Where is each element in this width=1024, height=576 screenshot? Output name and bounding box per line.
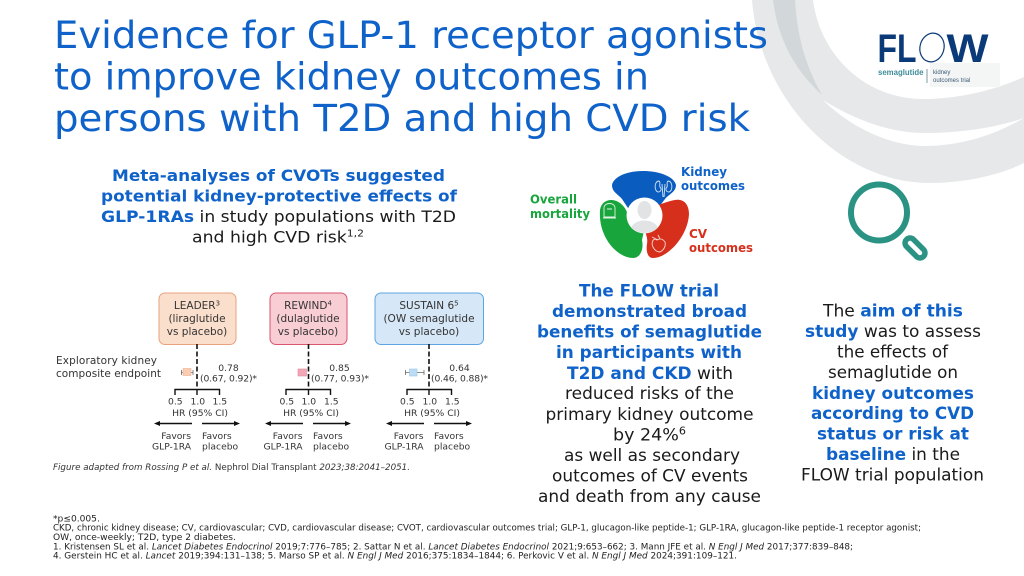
title: Evidence for GLP-1 receptor agonists bbox=[54, 13, 768, 57]
text block: FLOW trial results: benefits of semaglutide bbox=[537, 322, 762, 342]
study box: REWIND: REWIND bbox=[284, 300, 327, 312]
study box: SUSTAIN 6 bbox=[375, 293, 484, 344]
text block: FLOW trial results bbox=[537, 282, 762, 506]
text block: aim of study: the effects of bbox=[837, 342, 949, 362]
values: (0.67, 0.92)* bbox=[200, 374, 257, 384]
study box: SUSTAIN 6: (OW semaglutide bbox=[383, 313, 475, 325]
label: kidney outcomes: Kidney bbox=[681, 165, 727, 179]
hazard ratio marker bbox=[182, 368, 193, 376]
title: to improve kidney outcomes in bbox=[54, 54, 649, 98]
favors labels bbox=[152, 431, 239, 452]
values: (0.46, 0.88)* bbox=[431, 374, 488, 384]
FLOW logo: FL bbox=[878, 27, 916, 71]
favors labels: Favors bbox=[313, 431, 343, 442]
values: HR (95% CI) bbox=[283, 408, 339, 419]
favors labels: Favors bbox=[434, 431, 464, 442]
lobe: CV outcomes bbox=[644, 200, 689, 258]
favors arrows bbox=[154, 421, 240, 426]
text block: FLOW trial results: The FLOW trial bbox=[579, 282, 719, 300]
text block: aim of study: FLOW trial population bbox=[801, 466, 984, 484]
text block: FLOW trial results: as well as secondary bbox=[564, 446, 740, 465]
favors labels bbox=[263, 431, 350, 452]
favors labels: Favors bbox=[202, 431, 232, 442]
favors labels: placebo bbox=[313, 442, 350, 452]
values: 0.5 bbox=[280, 396, 294, 408]
label: overall mortality bbox=[530, 192, 590, 221]
lobe: overall mortality bbox=[600, 200, 645, 258]
footnotes: CKD, chronic kidney disease; CV, cardiovascular; CVD, cardiovascular disease; CVOT, cardiovascular outcomes trial; GLP-1, glucagon-like peptide-1; GLP-1RA, glucagon-like peptide-1 receptor agonist; bbox=[53, 524, 921, 534]
study box: LEADER bbox=[159, 293, 236, 344]
favors arrows bbox=[265, 421, 351, 426]
favors labels: placebo bbox=[202, 442, 239, 452]
text block: FLOW trial results: 6 bbox=[679, 426, 686, 438]
favors labels: Favors bbox=[161, 431, 191, 442]
footnotes: 1. Kristensen SL et al. Lancet Diabetes Endocrinol 2019;7:776–785; 2. Sattar N et al. Lancet Diabetes Endocrinol 2021;9:653–662; 3. Mann JFE et al. N Engl J Med 2017;377:839–848; bbox=[53, 542, 853, 552]
values: 0.85 bbox=[329, 363, 350, 374]
favors labels: GLP-1RA bbox=[384, 442, 424, 452]
values: 1.0 bbox=[190, 396, 205, 408]
text block: FLOW trial results: by 24% bbox=[613, 426, 675, 444]
text block: meta-analyses: Meta-analyses of CVOTs suggested bbox=[112, 166, 445, 185]
label: overall mortality: mortality bbox=[530, 207, 590, 221]
values: 0.78 bbox=[218, 363, 239, 374]
icon: magnifying glass bbox=[851, 184, 927, 260]
label: CV outcomes: outcomes bbox=[689, 241, 753, 255]
text block: aim of study bbox=[801, 302, 984, 484]
study box: SUSTAIN 6: vs placebo) bbox=[399, 326, 459, 338]
values: 1.0 bbox=[302, 396, 316, 408]
axis bbox=[175, 344, 220, 395]
values: 1.5 bbox=[445, 396, 460, 408]
FLOW logo: kidney bbox=[933, 70, 950, 76]
values: (0.77, 0.93)* bbox=[311, 374, 369, 384]
text block: meta-analyses: GLP-1RAs in study populations with T2D bbox=[101, 207, 456, 226]
values: HR (95% CI) bbox=[172, 408, 228, 419]
background arcs bbox=[752, 0, 1024, 183]
footnotes: OW, once-weekly; T2D, type 2 diabetes. bbox=[53, 533, 236, 543]
FLOW logo bbox=[878, 27, 1000, 87]
study box: LEADER: LEADER bbox=[174, 300, 216, 312]
panel: LEADER forest plot bbox=[56, 293, 257, 452]
study box: REWIND: (dulaglutide bbox=[276, 313, 340, 325]
panel: SUSTAIN 6 forest plot bbox=[375, 293, 488, 452]
study box: LEADER: (liraglutide bbox=[168, 313, 226, 325]
text block: FLOW trial results: T2D and CKD with bbox=[567, 364, 733, 383]
values: 1.5 bbox=[324, 396, 339, 408]
label: kidney outcomes: outcomes bbox=[681, 179, 745, 193]
favors labels: Favors bbox=[273, 431, 303, 442]
values: HR (95% CI) bbox=[404, 408, 460, 419]
favors labels: GLP-1RA bbox=[263, 442, 303, 452]
favors labels: Favors bbox=[394, 431, 424, 442]
values bbox=[400, 363, 488, 419]
text block: FLOW trial results: reduced risks of the bbox=[565, 384, 734, 403]
panel: REWIND forest plot bbox=[263, 293, 369, 452]
favors arrows bbox=[386, 421, 472, 426]
footnotes bbox=[53, 514, 921, 562]
text block: FLOW trial results: primary kidney outcome bbox=[546, 405, 754, 424]
text block: aim of study: study was to assess bbox=[805, 322, 981, 341]
text block: meta-analyses: and high CVD risk bbox=[192, 228, 335, 246]
study box: REWIND: 4 bbox=[327, 300, 332, 308]
text block: aim of study: status or risk at bbox=[817, 424, 969, 444]
text block: aim of study: kidney outcomes bbox=[812, 384, 974, 403]
favors labels bbox=[384, 431, 471, 452]
values: 1.5 bbox=[212, 396, 227, 408]
study box: SUSTAIN 6: SUSTAIN 6 bbox=[399, 300, 454, 312]
title: persons with T2D and high CVD risk bbox=[54, 96, 750, 140]
central person bbox=[626, 198, 662, 234]
text block: FLOW trial results: outcomes of CV events bbox=[552, 466, 748, 486]
text block: aim of study: semaglutide on bbox=[828, 363, 958, 382]
label: CV outcomes: CV bbox=[689, 227, 708, 241]
study box: SUSTAIN 6: 5 bbox=[454, 300, 459, 308]
favors labels: GLP-1RA bbox=[152, 442, 192, 452]
values: 0.5 bbox=[400, 396, 415, 408]
text block: meta-analyses bbox=[101, 166, 458, 246]
text block: FLOW trial results: in participants with bbox=[556, 343, 742, 362]
text block: aim of study: baseline in the bbox=[826, 445, 960, 464]
hazard ratio marker bbox=[406, 369, 424, 376]
outcomes diagram bbox=[530, 165, 753, 258]
label: CV outcomes bbox=[689, 227, 753, 255]
icon: kidneys bbox=[655, 181, 672, 197]
FLOW logo: semaglutide bbox=[878, 68, 924, 77]
values bbox=[280, 363, 369, 419]
endpoint label: Exploratory kidney bbox=[56, 355, 157, 367]
endpoint label: composite endpoint bbox=[56, 368, 161, 380]
label: overall mortality: Overall bbox=[530, 192, 577, 206]
text block: meta-analyses: potential kidney-protective effects of bbox=[101, 186, 458, 206]
icon: heart bbox=[652, 235, 665, 252]
label: kidney outcomes bbox=[681, 165, 745, 193]
text block: FLOW trial results: demonstrated broad bbox=[552, 302, 747, 321]
footnotes: 4. Gerstein HC et al. Lancet 2019;394:131–138; 5. Marso SP et al. N Engl J Med 2016;375:1834–1844; 6. Perkovic V et al. N Engl J Med 2024;391:109–121. bbox=[53, 552, 737, 562]
text block: FLOW trial results: and death from any cause bbox=[538, 487, 761, 506]
FLOW logo: W bbox=[946, 27, 989, 71]
title bbox=[54, 13, 768, 140]
study box: LEADER: 3 bbox=[216, 300, 220, 308]
study box: LEADER: vs placebo) bbox=[167, 326, 227, 338]
lobe: kidney outcomes bbox=[612, 171, 676, 208]
figure source note: Figure adapted from Rossing P et al. Nephrol Dial Transplant 2023;38:2041–2051. bbox=[53, 463, 410, 473]
values: 0.64 bbox=[449, 363, 470, 374]
values: 1.0 bbox=[422, 396, 437, 408]
values bbox=[168, 363, 257, 419]
hazard ratio marker bbox=[298, 369, 306, 376]
text block: aim of study: according to CVD bbox=[811, 404, 974, 423]
icon: gravestone bbox=[603, 204, 616, 218]
study box: REWIND: vs placebo) bbox=[278, 326, 338, 338]
FLOW logo: outcomes trial bbox=[933, 78, 970, 84]
study box: REWIND bbox=[270, 293, 347, 344]
footnotes: *p≤0.005. bbox=[53, 514, 100, 524]
values: 0.5 bbox=[168, 396, 183, 408]
axis bbox=[407, 344, 452, 395]
text block: aim of study: The aim of this bbox=[822, 302, 963, 320]
text block: meta-analyses: 1,2 bbox=[347, 228, 364, 240]
favors labels: placebo bbox=[434, 442, 471, 452]
axis bbox=[286, 344, 330, 395]
